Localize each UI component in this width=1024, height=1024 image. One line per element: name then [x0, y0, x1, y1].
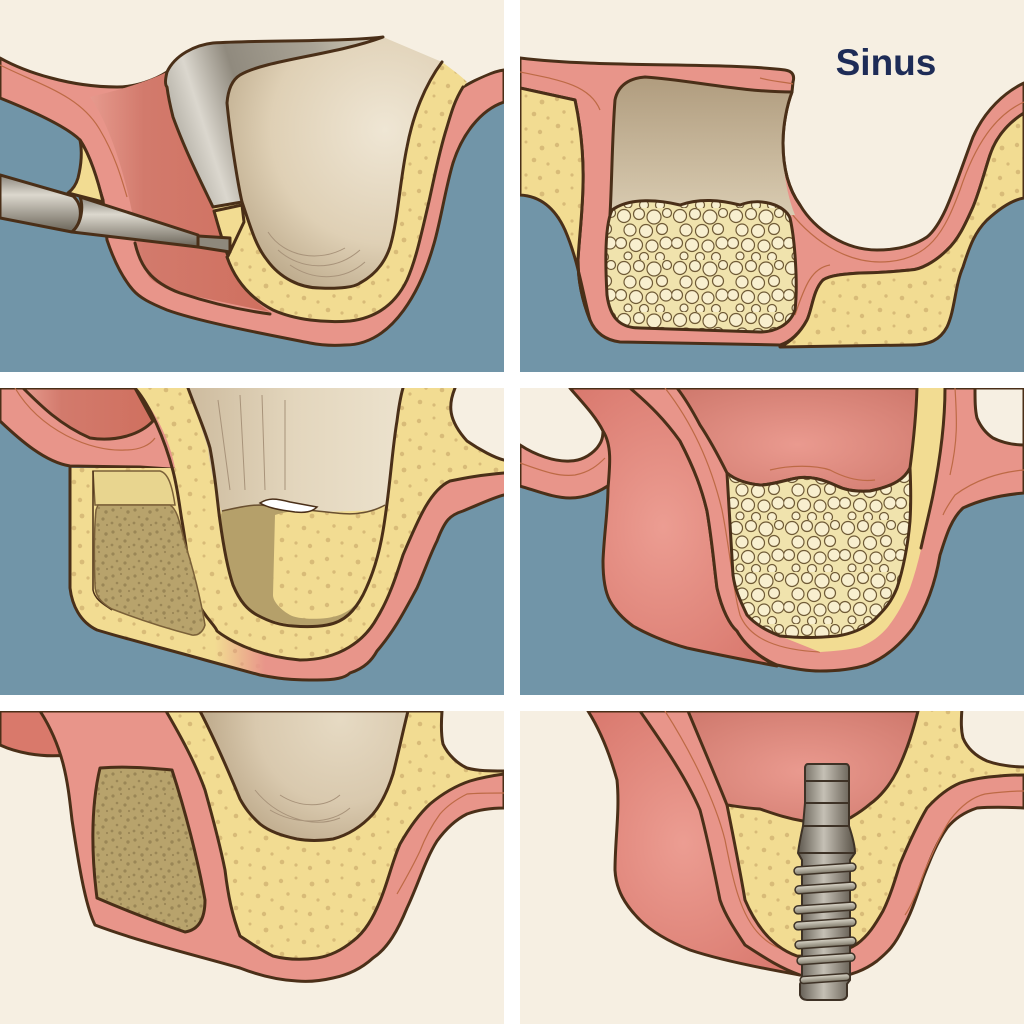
handpiece [0, 175, 230, 252]
dark pink top left [0, 711, 68, 756]
blue background [520, 196, 1024, 372]
bone [688, 711, 1024, 956]
bone [166, 711, 504, 959]
flap [588, 711, 800, 975]
panel: block graft placed [0, 711, 504, 1024]
bone lining outline [921, 388, 945, 548]
elevator instrument [166, 37, 383, 207]
label: Sinus: Sinus [836, 42, 936, 83]
lighter graft section [273, 505, 385, 619]
inner gum line [0, 65, 127, 197]
bone outer outline [227, 87, 463, 322]
block graft [93, 767, 205, 932]
block frame edge [93, 471, 112, 610]
gum inner line [665, 711, 795, 952]
cream corner [452, 388, 504, 458]
graft [727, 468, 911, 638]
cream above cavity [472, 70, 494, 80]
implant threads [794, 863, 856, 984]
cream notch [975, 388, 1024, 445]
gum [520, 58, 1024, 345]
yellow sliver [68, 140, 103, 202]
implant [794, 764, 856, 1000]
bone [70, 388, 504, 675]
panel: implant placed [520, 708, 1024, 1024]
gum lines [665, 388, 1024, 652]
flap lower outline [135, 243, 270, 314]
graft filled cavity [220, 505, 385, 626]
cream corner left [520, 388, 603, 461]
implant collar lines [798, 781, 855, 853]
panel: healed bone with block [0, 388, 504, 695]
dark sinus membrane [677, 388, 917, 491]
dark pink sinus [23, 388, 153, 439]
bone outlines [70, 388, 504, 680]
white highlight [260, 499, 317, 512]
cream notch [961, 708, 1024, 767]
panel: graft under membrane [520, 388, 1024, 695]
right bone [780, 113, 1024, 347]
pink lower band [205, 473, 504, 680]
gum inner line [520, 72, 1024, 315]
bone wall [213, 62, 467, 322]
bone lining [780, 388, 945, 652]
right gum inner line [905, 791, 1024, 915]
block graft [94, 505, 205, 635]
panel: sinus graft [520, 0, 1024, 372]
reflected flap [90, 72, 270, 312]
blue background tissue [0, 90, 504, 372]
block upper frame [93, 471, 175, 505]
cavity outline [610, 77, 800, 215]
cavity upper [188, 388, 403, 515]
sinus cavity [200, 711, 408, 840]
gum inner line [397, 793, 504, 894]
gum outer shape [0, 58, 504, 345]
gum band [630, 388, 1024, 671]
cavity outline [242, 62, 442, 288]
pink gum [40, 711, 504, 981]
sinus cavity [227, 37, 442, 288]
panel: incision and membrane elevation [0, 0, 504, 372]
cavity outline [188, 388, 403, 627]
bone graft [606, 200, 796, 332]
sinus cavity [608, 77, 795, 225]
elevator yellow tip [214, 205, 244, 256]
pink ring [520, 388, 630, 498]
pink ring top left [0, 388, 185, 470]
flap [570, 388, 777, 666]
gum band [640, 711, 1024, 978]
sinus membrane [688, 711, 918, 821]
fill level line [222, 505, 385, 514]
bone lower outline [727, 775, 1024, 956]
left bone [520, 88, 590, 320]
